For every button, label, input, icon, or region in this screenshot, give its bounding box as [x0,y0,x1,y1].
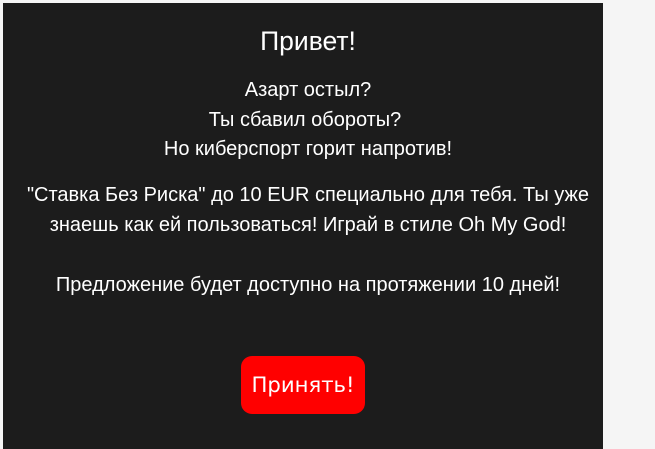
text block: intro questions: Ты сбавил обороты? [209,108,401,130]
button: accept [241,356,365,414]
button: accept: Принять! [251,372,355,397]
text block: intro questions [164,79,452,160]
text block: offer duration: Предложение будет доступно на протяжении 10 дней! [56,274,560,296]
text block: intro questions: Азарт остыл? [245,79,371,101]
text block: offer description [27,184,589,236]
text block: offer description: "Ставка Без Риска" до 10 EUR специально для тебя. Ты уже [27,184,589,206]
text block: offer description: знаешь как ей пользоваться! Играй в стиле Oh My God! [50,214,566,236]
heading: greeting: Привет! [260,26,356,56]
text block: intro questions: Но киберспорт горит напротив! [164,138,452,160]
